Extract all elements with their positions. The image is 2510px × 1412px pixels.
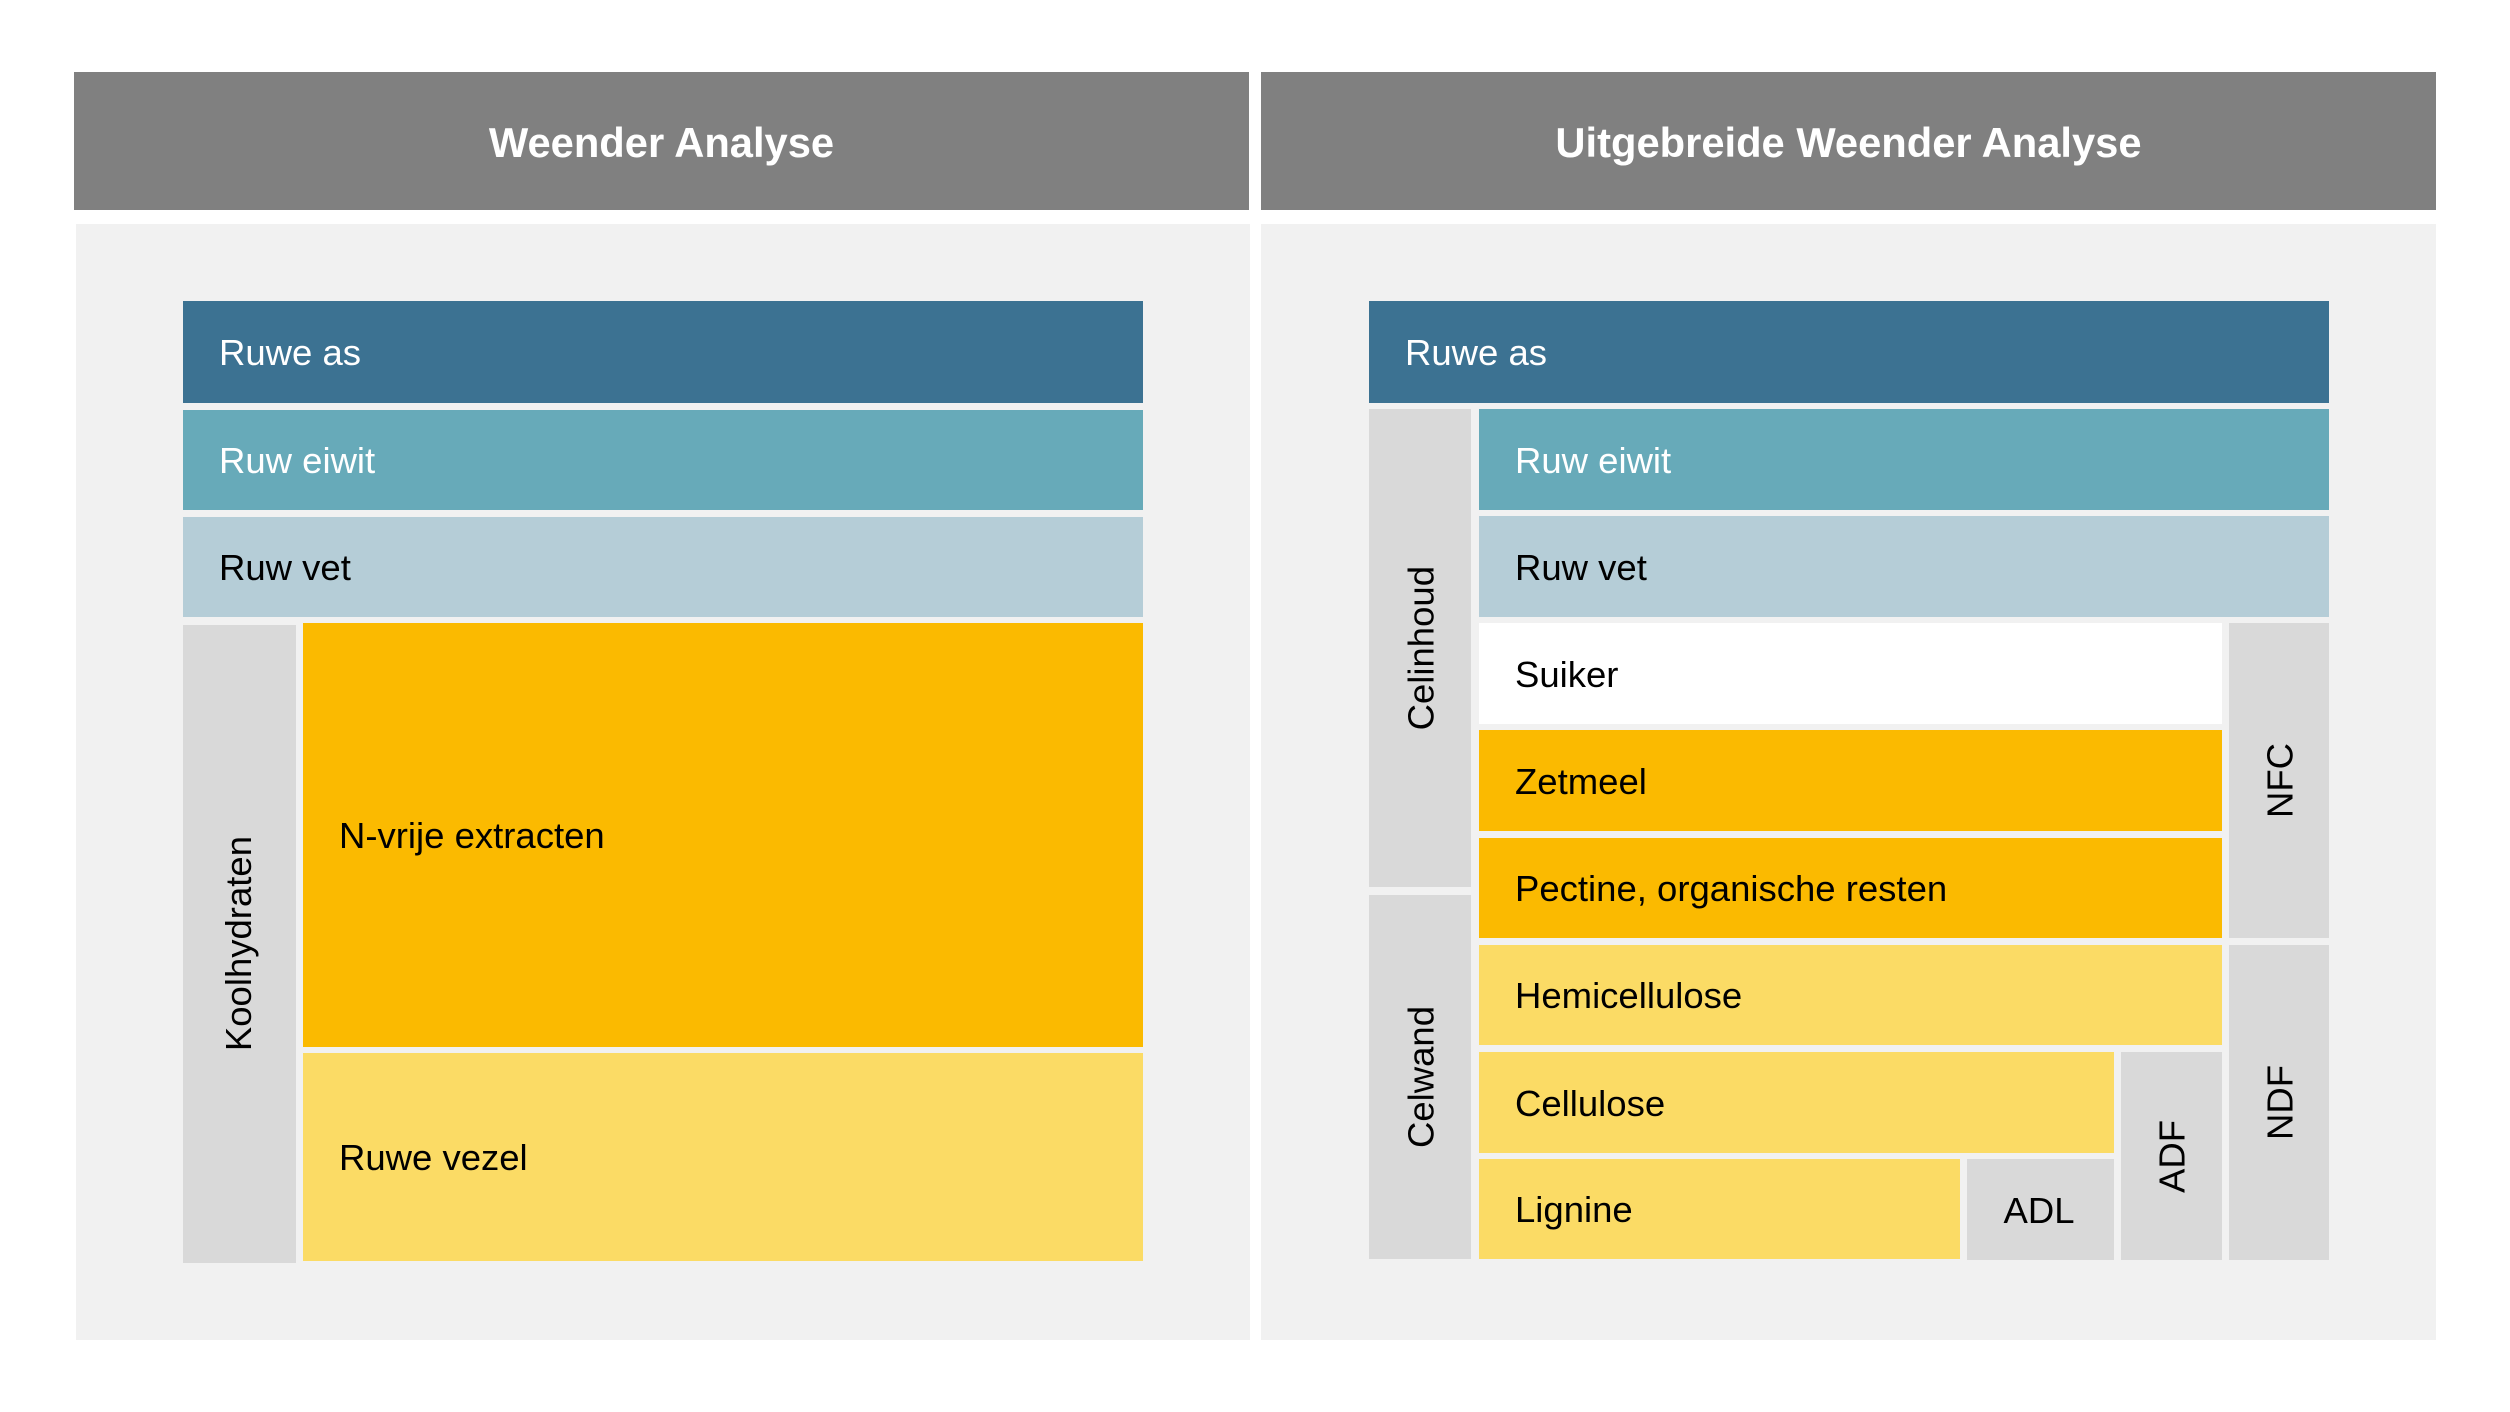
right: ADL — [1967, 1159, 2114, 1260]
right: NFC side label: NFC — [2259, 743, 2300, 818]
right: ADF side label: ADF — [2152, 1120, 2193, 1192]
header: Uitgebreide Weender Analyse: Uitgebreide Weender Analyse — [1555, 119, 2142, 166]
header: Uitgebreide Weender Analyse — [1261, 72, 2436, 210]
right: Hemicellulose — [1479, 945, 2222, 1045]
right: Zetmeel — [1479, 730, 2222, 831]
right: Cellulose: Cellulose — [1515, 1083, 1665, 1124]
right: NDF side label — [2229, 945, 2329, 1260]
left: Koolhydraten side label: Koolhydraten — [218, 836, 259, 1052]
right: Lignine — [1479, 1159, 1960, 1259]
left: Ruwe as: Ruwe as — [219, 332, 361, 373]
right: Ruw eiwit — [1479, 409, 2329, 510]
right: Ruw vet — [1479, 516, 2329, 617]
right: NDF side label: NDF — [2259, 1065, 2300, 1140]
right: Pectine, organische resten — [1479, 838, 2222, 938]
right: Celinhoud side label — [1369, 409, 1471, 887]
right: Lignine: Lignine — [1515, 1189, 1633, 1230]
right: Celwand side label — [1369, 895, 1471, 1259]
left: Ruw vet — [183, 517, 1143, 617]
right: Hemicellulose: Hemicellulose — [1515, 975, 1742, 1016]
panel: Uitgebreide Weender Analyse — [1261, 224, 2436, 1340]
left: Ruw vet: Ruw vet — [219, 547, 351, 588]
left: Ruwe vezel: Ruwe vezel — [339, 1137, 528, 1178]
left: N-vrije extracten — [303, 623, 1143, 1047]
left: N-vrije extracten: N-vrije extracten — [339, 815, 605, 856]
left: Koolhydraten side label — [183, 625, 296, 1263]
right: Suiker: Suiker — [1515, 654, 1618, 695]
right: Ruw eiwit: Ruw eiwit — [1515, 440, 1671, 481]
right: ADL: ADL — [2003, 1190, 2074, 1231]
left: Ruw eiwit — [183, 410, 1143, 510]
right: Ruwe as — [1369, 301, 2329, 403]
left: Ruw eiwit: Ruw eiwit — [219, 440, 375, 481]
right: Zetmeel: Zetmeel — [1515, 761, 1647, 802]
right: Ruwe as: Ruwe as — [1405, 332, 1547, 373]
right: Celwand side label: Celwand — [1400, 1006, 1441, 1148]
panel: Weender Analyse — [76, 224, 1250, 1340]
header: Weender Analyse — [74, 72, 1249, 210]
right: Celinhoud side label: Celinhoud — [1400, 566, 1441, 730]
right: ADF side label — [2121, 1052, 2222, 1260]
right: Cellulose — [1479, 1052, 2114, 1153]
right: Ruw vet: Ruw vet — [1515, 547, 1647, 588]
left: Ruwe as — [183, 301, 1143, 403]
header: Weender Analyse: Weender Analyse — [489, 119, 834, 166]
right: Pectine, organische resten: Pectine, organische resten — [1515, 868, 1947, 909]
right: Suiker — [1479, 623, 2222, 724]
left: Ruwe vezel — [303, 1053, 1143, 1261]
right: NFC side label — [2229, 623, 2329, 938]
